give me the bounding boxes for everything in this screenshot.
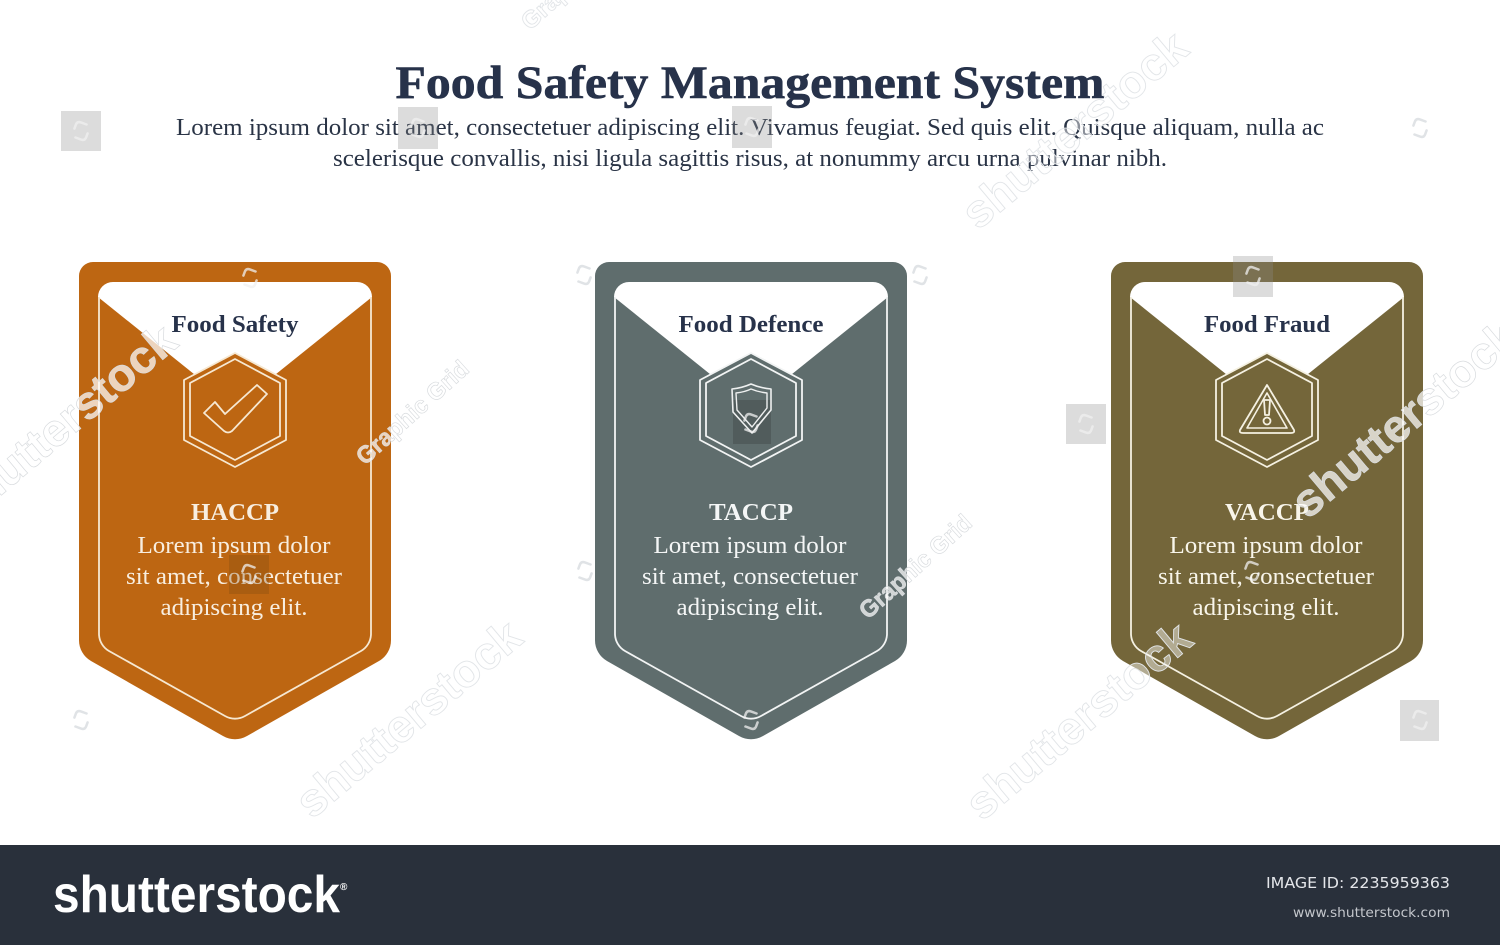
- website: www.shutterstock.com: [1293, 905, 1450, 921]
- text block: HACCP: HACCP: [191, 500, 279, 526]
- watermark layer: Graphic Grid: [854, 509, 978, 624]
- image id: IMAGE ID: 2235959363: [1266, 874, 1450, 892]
- text block: intro paragraph: Lorem ipsum dolor sit amet, consectetuer adipiscing elit. Vivamus feugiat. Sed quis elit. Quisque aliquam, nulla ac: [176, 115, 1324, 141]
- text block: VACCP: adipiscing elit.: [1192, 595, 1340, 621]
- text block: TACCP: TACCP: [709, 500, 793, 526]
- logo registered mark: ®: [340, 882, 348, 893]
- text block: intro paragraph: [176, 115, 1324, 172]
- text block: TACCP: sit amet, consectetuer: [642, 564, 858, 590]
- icon: warning in hexagon: [1216, 353, 1318, 467]
- text block: VACCP: [1158, 500, 1374, 621]
- text block: intro paragraph: scelerisque convallis, nisi ligula sagittis risus, at nonummy arcu urna pulvinar nibh.: [333, 146, 1167, 172]
- text block: TACCP: adipiscing elit.: [676, 595, 824, 621]
- text block: HACCP: Lorem ipsum dolor: [138, 533, 331, 559]
- footer bar: [0, 845, 1500, 945]
- heading: title: Food Safety Management System: [396, 57, 1104, 109]
- label: Food Defence: Food Defence: [678, 312, 824, 338]
- text block: VACCP: sit amet, consectetuer: [1158, 564, 1374, 590]
- logo: shutterstock: shutterstock: [53, 866, 340, 924]
- text block: VACCP: Lorem ipsum dolor: [1170, 533, 1363, 559]
- text block: HACCP: [126, 500, 342, 621]
- panel: Food Defence: [595, 262, 907, 739]
- label: Food Safety: Food Safety: [172, 312, 298, 338]
- text block: HACCP: adipiscing elit.: [160, 595, 308, 621]
- watermark layer: shutterstock: [285, 609, 532, 828]
- text block: TACCP: Lorem ipsum dolor: [654, 533, 847, 559]
- panel: Food Safety: [79, 262, 391, 739]
- watermark layer: shutterstock: [951, 20, 1198, 239]
- watermark layer: shutterstock: [955, 611, 1202, 830]
- panel: Food Fraud: [1111, 262, 1423, 739]
- icon: check in hexagon: [184, 353, 286, 467]
- icon: shield in hexagon: [700, 353, 802, 467]
- text block: TACCP: [642, 500, 858, 621]
- text block: HACCP: sit amet, consectetuer: [126, 564, 342, 590]
- watermark layer: Graphic Grid: [351, 355, 475, 470]
- label: Food Fraud: Food Fraud: [1204, 312, 1331, 338]
- text block: VACCP: VACCP: [1225, 500, 1309, 526]
